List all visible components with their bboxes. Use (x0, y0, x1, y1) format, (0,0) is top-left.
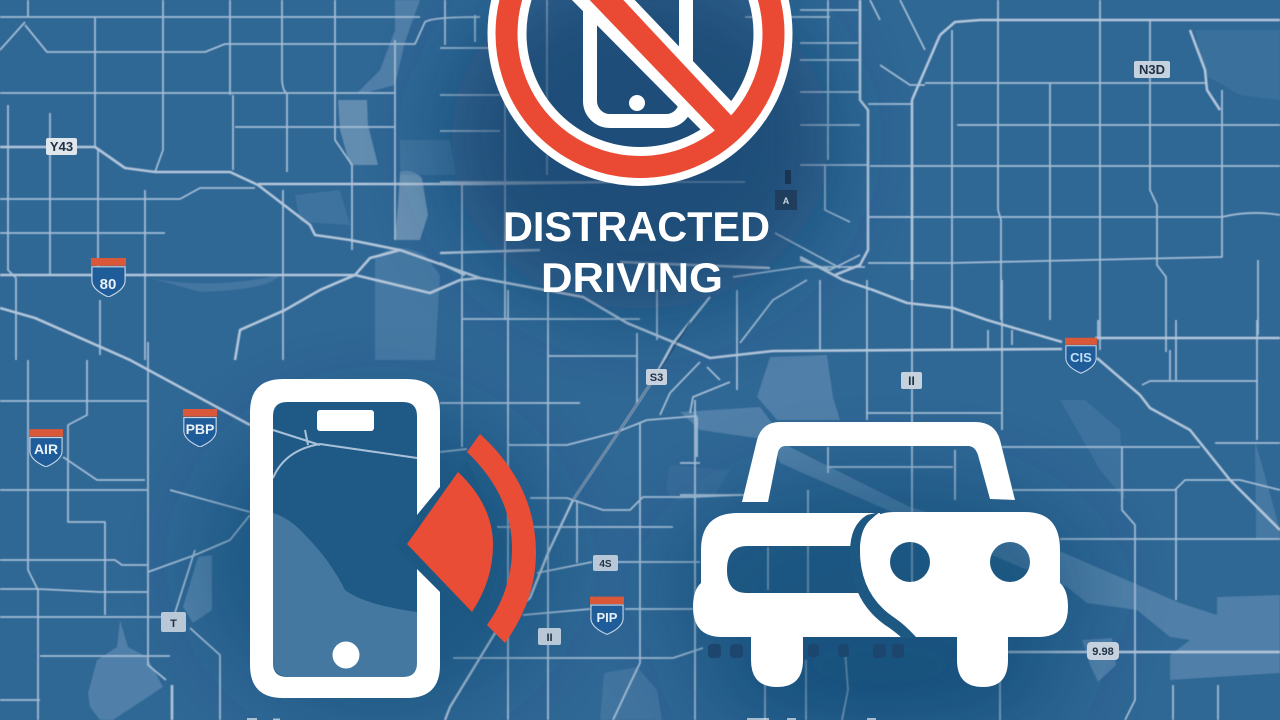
inner signal wedge (407, 472, 493, 612)
sign mid: II (546, 632, 553, 644)
sign center (646, 369, 667, 385)
icon: phone with red signal (250, 379, 536, 698)
icon: two cars (693, 422, 1068, 687)
phone screen (273, 402, 417, 677)
dark centre of dual carriageway (573, 322, 690, 500)
shield PIP (590, 597, 624, 634)
screen roads (273, 430, 417, 478)
sign center right (901, 372, 922, 389)
sign right (1087, 642, 1119, 660)
earpiece (317, 410, 374, 431)
phone frame (250, 379, 440, 698)
shield CIS (1065, 338, 1097, 373)
cropped label tops at bottom edge (247, 718, 876, 720)
red slash (580, 0, 742, 140)
shield 80: 80 (100, 276, 116, 293)
icon: no phone prohibition sign (506, 0, 774, 167)
sign center: S3 (650, 372, 663, 384)
shield AR: AIR (34, 441, 58, 457)
screen water patch (273, 513, 417, 677)
dark vignette shading around icons (210, 0, 1090, 720)
car separator (850, 512, 918, 638)
right car body (860, 512, 1068, 687)
dark sign near ring (775, 170, 797, 210)
title: Distracted Driving (503, 203, 770, 301)
shield PBP (183, 409, 217, 447)
dark sign near ring: A (783, 196, 790, 206)
shield PIP: PIP (597, 610, 618, 625)
sign above shield: 4S (599, 559, 612, 570)
left car body (693, 513, 902, 687)
sign above shield (593, 555, 618, 571)
sign N3D (1134, 61, 1170, 78)
sign right: 9.98 (1092, 646, 1114, 658)
small grey route signs (46, 61, 1170, 660)
interstate shields (29, 258, 1097, 634)
sign lower left: T (170, 618, 177, 630)
sign N3D: N3D (1139, 62, 1165, 77)
shield PBP: PBP (186, 421, 214, 437)
signal notch (395, 462, 505, 628)
shield AR (29, 429, 63, 467)
shield CIS: CIS (1070, 350, 1092, 365)
sign mid (538, 628, 561, 645)
sign center right: II (908, 374, 915, 388)
phone inside sign (590, 0, 686, 121)
car roof arch (742, 422, 1015, 502)
sign lower left (161, 612, 186, 632)
home button (332, 642, 360, 668)
sign Y43: Y43 (50, 139, 73, 154)
prohibition ring (507, 0, 773, 166)
outer signal arc (467, 434, 536, 643)
title: Distracted Driving: DISTRACTED (503, 203, 770, 250)
shield 80 (91, 258, 126, 297)
title: Distracted Driving: DRIVING (541, 254, 723, 301)
dark artefact marks under car (708, 644, 904, 658)
white slash halo (572, 0, 732, 130)
sign Y43 (46, 138, 77, 155)
